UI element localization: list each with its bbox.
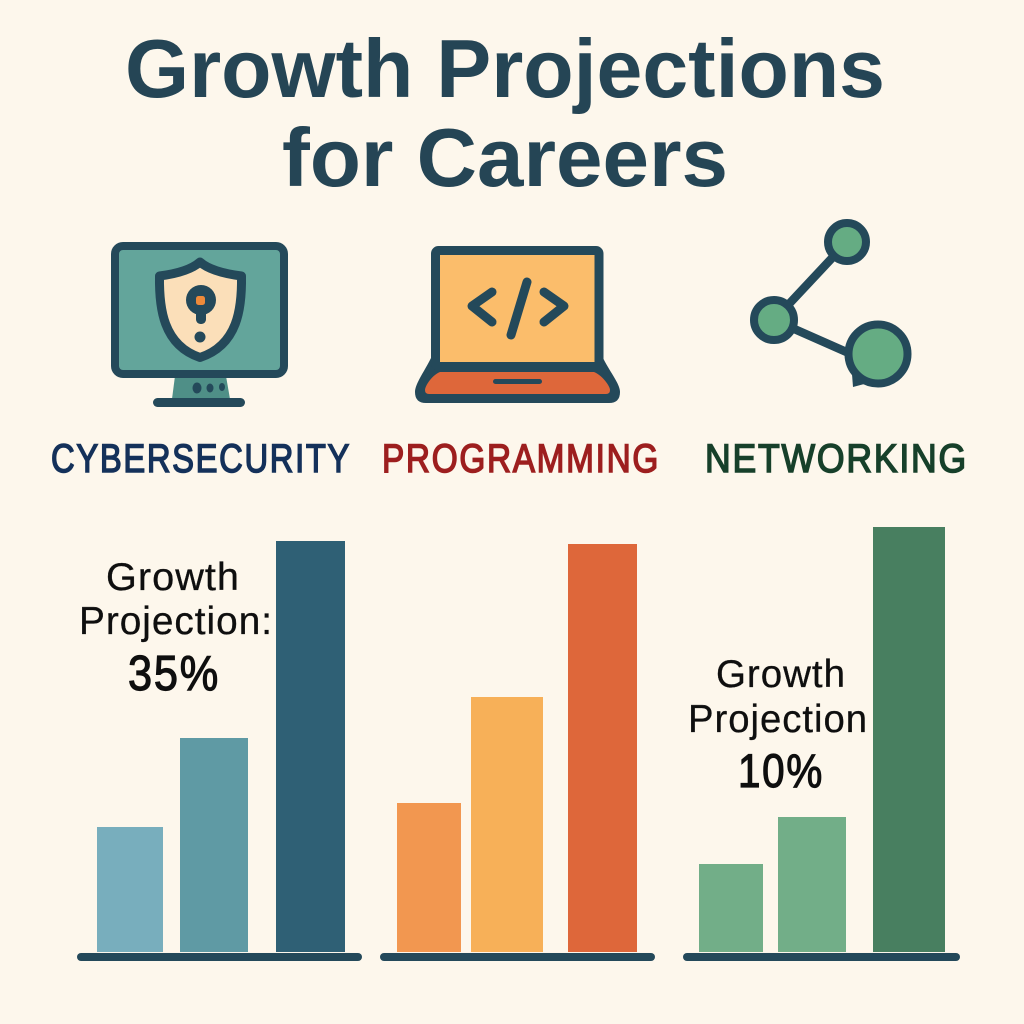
bar chart: cybersecurity [77,541,362,961]
callout: networking growth projection: Growth [716,653,846,696]
callout: cybersecurity growth projection [79,556,273,701]
bar chart: programming [380,544,655,961]
callout: networking growth projection: 10% [738,744,824,797]
label: networking: NETWORKING [705,437,968,481]
callout: networking growth projection [688,653,868,797]
callout: cybersecurity growth projection: Growth [106,556,240,599]
label: programming: PROGRAMMING [382,437,660,481]
callout: cybersecurity growth projection: 35% [128,647,220,701]
title: for Careers [282,111,728,204]
callout: cybersecurity growth projection: Projection: [79,600,273,643]
bar chart: networking [683,527,960,961]
title: Growth Projections [125,22,885,115]
icon: monitor with shield [115,246,284,407]
title [125,22,885,204]
label: cybersecurity: CYBERSECURITY [51,437,351,481]
icon: network nodes [754,223,908,387]
callout: networking growth projection: Projection [688,698,868,741]
icon: laptop with code [415,250,620,403]
